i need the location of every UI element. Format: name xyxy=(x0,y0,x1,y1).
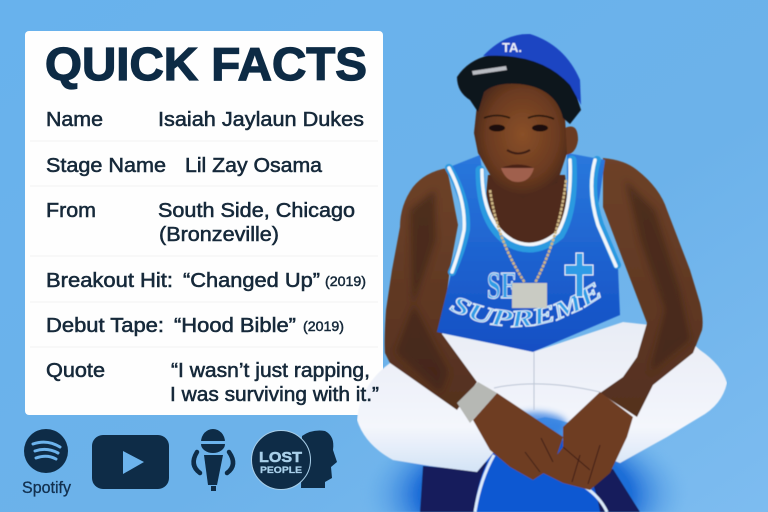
seat blue xyxy=(474,422,600,512)
floor glow xyxy=(360,420,690,512)
row: from: (Bronzeville) xyxy=(159,224,279,246)
right arm xyxy=(600,158,703,417)
jersey lettering: SE xyxy=(487,265,517,307)
row: quote xyxy=(46,360,379,406)
row: stage name: Stage Name xyxy=(46,155,166,177)
jersey cross xyxy=(565,253,593,297)
icon: lost people logo: PEOPLE xyxy=(260,465,302,476)
neck xyxy=(482,175,572,252)
row: breakout hit xyxy=(46,270,366,292)
row: debut tape: (2019) xyxy=(303,318,344,334)
hands xyxy=(473,392,633,490)
row: debut tape: Debut Tape: xyxy=(46,315,164,337)
mouth xyxy=(501,164,534,182)
nose xyxy=(507,150,530,154)
row dividers xyxy=(30,141,378,347)
row: debut tape xyxy=(46,315,344,337)
chain xyxy=(490,180,566,283)
icon: spotify xyxy=(22,429,71,497)
icon: lost people logo: LOST xyxy=(259,449,302,466)
row: debut tape: “Hood Bible” xyxy=(174,315,296,337)
row: from: From xyxy=(46,200,96,222)
jersey xyxy=(437,153,620,352)
icon: youtube play button xyxy=(92,435,169,489)
row: breakout hit: (2019) xyxy=(325,273,366,289)
figure: rapper crouching in blue jersey xyxy=(357,34,727,512)
row: from: South Side, Chicago xyxy=(158,200,355,222)
collar and arm trim xyxy=(449,160,617,272)
face xyxy=(474,82,567,198)
row: quote: I was surviving with it.” xyxy=(170,384,379,406)
pant seams xyxy=(494,352,600,410)
cap sticker xyxy=(472,66,507,75)
bracelet xyxy=(457,382,497,423)
pendant xyxy=(512,283,547,308)
finger lines xyxy=(525,438,600,484)
row: stage name xyxy=(46,155,323,177)
row: breakout hit: Breakout Hit: xyxy=(46,270,173,292)
row: from xyxy=(46,200,355,246)
ear xyxy=(564,126,578,155)
pants xyxy=(357,322,727,472)
pant crotch shadow xyxy=(503,412,567,438)
row: name xyxy=(46,109,364,131)
eyes xyxy=(484,116,554,132)
icon: lost people logo xyxy=(252,430,337,490)
jersey lettering: SUPREME xyxy=(448,281,602,328)
title: QUICK FACTS xyxy=(45,38,367,90)
row: name: Name xyxy=(46,109,103,131)
panel: quick facts card xyxy=(25,31,383,415)
left arm xyxy=(385,168,477,410)
row: quote: Quote xyxy=(46,360,105,382)
cap crown xyxy=(483,34,581,105)
row: stage name: Lil Zay Osama xyxy=(185,155,323,177)
jersey lettering xyxy=(448,265,602,328)
cap logo: TA. xyxy=(502,40,522,55)
shoes xyxy=(420,460,640,512)
hair and cap brim xyxy=(457,54,581,124)
row: quote: “I wasn’t just rapping, xyxy=(171,360,370,382)
row: name: Isaiah Jaylaun Dukes xyxy=(158,109,364,131)
tattoos xyxy=(396,180,690,392)
icon: spotify: Spotify xyxy=(22,478,71,497)
icon: microphone xyxy=(194,429,233,491)
row: breakout hit: “Changed Up” xyxy=(183,270,320,292)
